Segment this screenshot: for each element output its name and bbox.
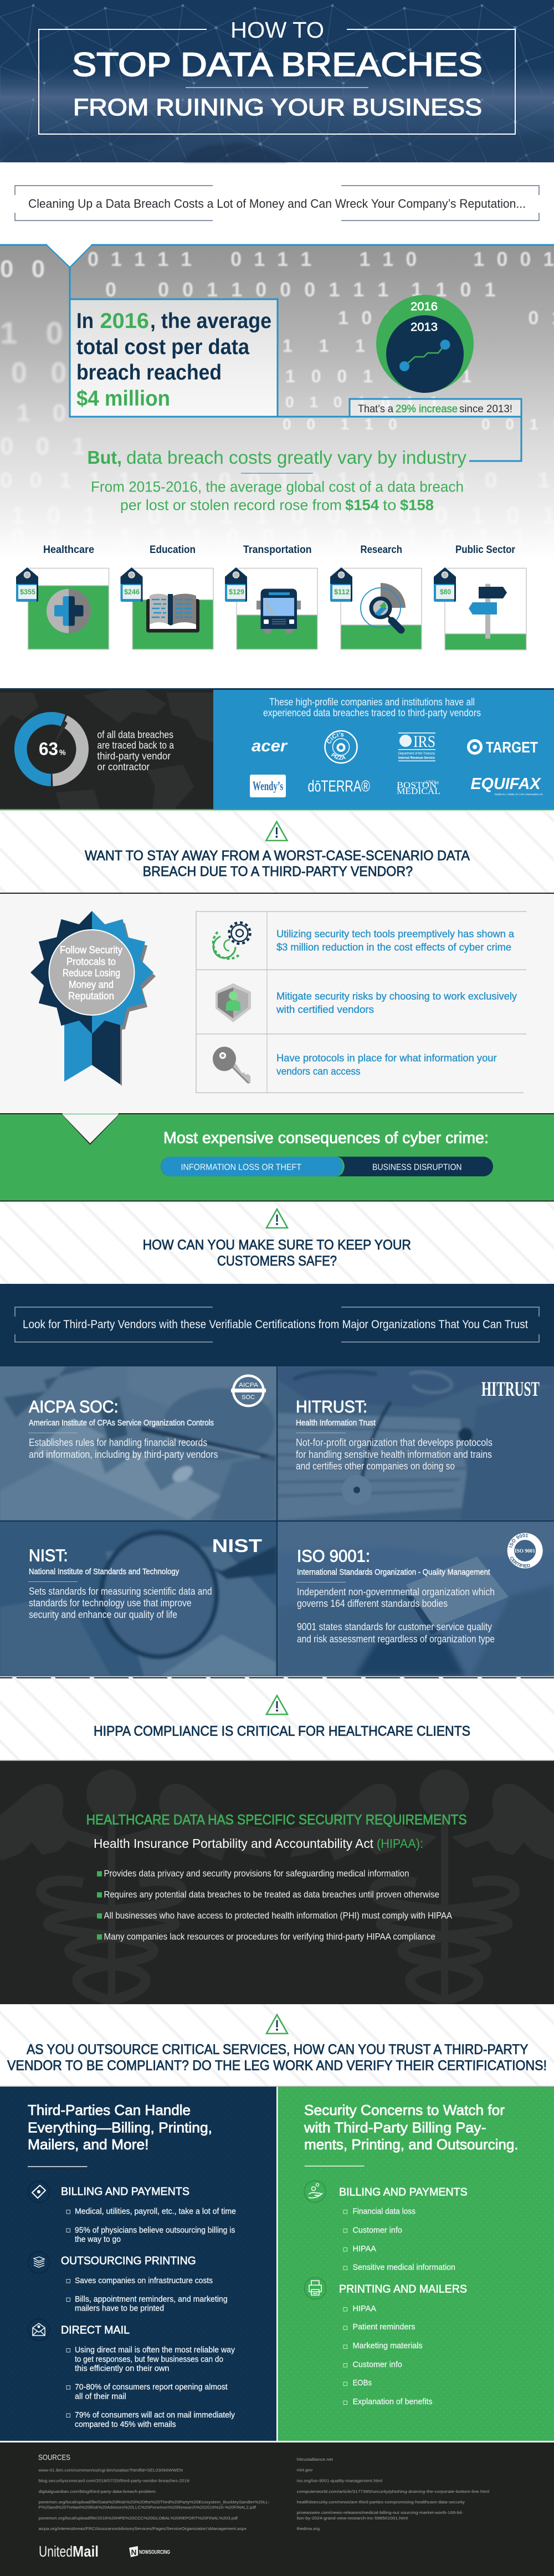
logo: iso 9001 certified: CERTIFIED	[510, 1557, 530, 1568]
callout: average cost: In	[76, 309, 94, 333]
section: keep customers safe	[0, 1201, 554, 1284]
heading: security requirements: HEALTHCARE DATA HAS SPECIFIC SECURITY REQUIREMENTS	[86, 1812, 467, 1827]
icon: open book	[146, 594, 199, 633]
heading: security concerns: Security Concerns to Watch for	[304, 2102, 505, 2118]
bullet list: hipaa: Requires any potential data breaches to be treated as data breaches until proven otherwise	[104, 1889, 439, 1900]
logo: boston medical: BOSTON	[397, 781, 437, 790]
subtitle: iso: International Standards Organization - Quality Management	[297, 1568, 490, 1577]
body: iso: governs 164 different standards bodies	[297, 1598, 448, 1609]
icon: caduceus watermark	[0, 1770, 554, 2004]
panel: iso 9001	[278, 1522, 554, 1676]
list: printing concerns: Marketing materials	[352, 2341, 423, 2350]
list: printing concerns: Explanation of benefits	[352, 2397, 433, 2406]
heading: outsourcing printing: OUTSOURCING PRINTING	[61, 2255, 196, 2267]
logo: aicpa soc	[231, 1374, 266, 1407]
column: transportation: Transportation	[243, 544, 311, 556]
text: third party share: or contractor	[97, 761, 150, 772]
body: aicpa: Establishes rules for handling financial records	[29, 1437, 207, 1448]
callout: 29% increase: since 2013!	[459, 403, 512, 415]
list: printing concerns: Customer info	[352, 2360, 402, 2369]
title frame	[39, 29, 515, 134]
text: mail items: to get responses, but few businesses can do	[75, 2354, 223, 2364]
heading: leg work	[7, 2042, 547, 2073]
panel: most expensive consequences	[0, 1114, 554, 1201]
heading: third parties: Third-Parties Can Handle	[28, 2102, 191, 2118]
bar: information loss vs disruption	[161, 1157, 493, 1176]
bullet list: hipaa: All businesses who have access to protected health information (PHI) must comply with HIPAA	[104, 1911, 453, 1921]
bar: information loss vs disruption: INFORMATION LOSS OR THEFT	[181, 1163, 301, 1172]
text: mail items: compared to 45% with emails	[75, 2420, 176, 2429]
icon: key	[213, 1047, 250, 1083]
logo: cicis pizza: PIZZA	[331, 752, 346, 760]
heading: worst case scenario	[85, 848, 470, 879]
text: third party share: of all data breaches	[97, 729, 173, 740]
text: mail items: this efficiently on their own	[75, 2364, 170, 2373]
heading: iso 9001: ISO 9001:	[297, 1546, 370, 1565]
subtitle: aicpa: American Institute of CPAs Service Organization Controls	[29, 1418, 214, 1427]
icon: billing	[28, 2181, 50, 2203]
column: healthcare: Healthcare	[43, 544, 94, 556]
panel: hitrust	[278, 1366, 554, 1520]
logo: iso 9001 certified: ISO 9001	[509, 1534, 528, 1548]
text: third party share: are traced back to a	[97, 740, 175, 751]
list: printing concerns: HIPAA	[352, 2304, 376, 2313]
body: nist: Sets standards for measuring scientific data and	[29, 1586, 212, 1597]
logo: target	[469, 739, 538, 756]
text: mail items: all of their mail	[75, 2391, 126, 2401]
sources: right column: healthitsecurity.com/news/are-third-parties-compromising-healthcare-data-security	[297, 2500, 465, 2505]
heading: direct mail: DIRECT MAIL	[61, 2324, 130, 2336]
list: billing concerns: Customer info	[352, 2225, 402, 2235]
sources: right column: prnewswire.com/news-releases/medical-billing-out sourcing-market-worth-169-bil-	[297, 2510, 463, 2515]
column: education: Education	[150, 544, 196, 556]
sources: left column: blog.securityscorecard.com/2016/07/20/third-party-vendor-breaches-2016	[39, 2478, 189, 2483]
heading: keep customers safe: HOW CAN YOU MAKE SURE TO KEEP YOUR	[143, 1237, 411, 1253]
title: how to: HOW TO	[230, 17, 324, 43]
sources: right column: thedma.org	[297, 2526, 320, 2531]
heading: sources: SOURCES	[38, 2453, 70, 2462]
sources: right column: iso.org/iso-9001-quality-management.html	[297, 2478, 382, 2483]
icon: warning triangle	[266, 822, 287, 841]
sources: left column	[38, 2467, 270, 2531]
logo: nowsourcing	[129, 2546, 170, 2557]
text: billing items: Medical, utilities, payroll, etc., take a lot of time	[75, 2207, 236, 2216]
body: nist: security and enhance our quality of life	[29, 1609, 177, 1620]
intro text: Cleaning Up a Data Breach Costs a Lot of Money and Can Wreck Your Company’s Reputation...	[28, 197, 526, 211]
text: high-profile companies: experienced data breaches traced to third-party vendors	[263, 707, 481, 718]
text: information access: Have protocols in place for what information your	[276, 1052, 497, 1064]
heading: costs vary by industry: data breach costs greatly vary by industry	[126, 447, 467, 468]
heading: billing and payments: BILLING AND PAYMENTS	[61, 2186, 189, 2198]
panel: certifications intro	[0, 1284, 554, 1678]
callout: 29% increase	[350, 399, 521, 461]
text: third party share: third-party vendor	[97, 750, 171, 761]
body: hitrust: and certifies other companies on doing so	[296, 1461, 455, 1472]
callout: average cost: $4 million	[76, 387, 170, 411]
logo: nowsourcing: N	[131, 2548, 136, 2557]
sources: left column: digitalguardian.com/blog/third-party-data-breach-problem	[39, 2489, 156, 2494]
icon: warning triangle	[266, 2015, 288, 2034]
callout: average cost: total cost per data	[76, 335, 249, 359]
sources: right column	[297, 2457, 489, 2531]
logo: nowsourcing: NOWSOURCING	[139, 2549, 170, 2555]
subheading: hipaa act: (HIPAA):	[377, 1836, 423, 1851]
text: security tech tools: $3 million reduction in the cost effects of cyber crime	[276, 941, 511, 953]
heading: worst case scenario: BREACH DUE TO A THIRD-PARTY VENDOR?	[143, 864, 413, 879]
heading: third parties: Mailers, and More!	[28, 2136, 148, 2153]
list: printing concerns	[343, 2304, 433, 2406]
icon: medical cross	[47, 589, 91, 633]
text: certified vendors	[276, 990, 517, 1015]
logo: acer: acer	[252, 737, 288, 755]
body: iso: and risk assessment regardless of organization type	[297, 1633, 495, 1645]
logo: equifax: EQUIFAX	[471, 775, 541, 793]
logo: cicis pizza: CiCi’s	[327, 733, 343, 744]
text: cost per record: $158	[400, 496, 434, 513]
panel: security concerns to watch	[278, 2087, 554, 2441]
chart: 2013 vs 2016 circles: 2016	[411, 300, 438, 313]
icon: magnifier	[361, 583, 406, 630]
logo: aicpa soc: AICPA	[239, 1382, 259, 1389]
sources: right column: hitrustalliance.net	[297, 2457, 334, 2462]
heading: aicpa soc: AICPA SOC:	[29, 1397, 119, 1416]
logo: doterra: dōTERRA®	[308, 778, 370, 796]
body: nist: standards for technology use that improve	[29, 1597, 192, 1609]
logo: wendys: Wendy’s	[253, 779, 283, 793]
body: hitrust	[296, 1437, 493, 1472]
logo: boston medical: MEDICAL	[397, 787, 440, 796]
list: billing concerns: Sensitive medical information	[352, 2263, 455, 2272]
price tag: $129: $129	[229, 587, 244, 596]
price tag: $246: $246	[124, 587, 140, 596]
text: printing items: Saves companies on infrastructure costs	[75, 2276, 213, 2285]
price tag: $112: $112	[334, 587, 350, 596]
badge: follow security protocols: Reputation	[68, 991, 114, 1002]
callout: average cost: 2016	[100, 309, 149, 333]
sources: left column: aicpa.org/InterestAreas/FRC/AssuranceAdvisoryServices/Pages/ServiceOrganization’sManagement.aspx	[39, 2526, 247, 2531]
logo: irs: IRS	[413, 733, 435, 751]
heading: keep customers safe: CUSTOMERS SAFE?	[217, 1253, 337, 1269]
title: stop data breaches: STOP DATA BREACHES	[72, 46, 483, 83]
panel: binary background with cost stats: 0 0	[11, 357, 74, 389]
list: printing	[66, 2280, 70, 2302]
panel: security protocols	[0, 893, 554, 1114]
logo: unitedmail: United	[39, 2543, 73, 2560]
icon: hand with coin	[304, 2181, 326, 2202]
text: printing items	[75, 2276, 228, 2313]
section: verify certifications	[0, 2004, 554, 2086]
logo: irs: Department of the Treasury	[398, 752, 435, 756]
body: aicpa	[29, 1437, 218, 1460]
text: high-profile companies	[263, 697, 481, 718]
heading: nist: NIST:	[29, 1545, 68, 1565]
chart: 63 percent donut: 63	[39, 739, 58, 759]
text: certified vendors: with certified vendors	[276, 1003, 374, 1015]
panel: nist	[0, 1522, 276, 1676]
heading: third parties: Everything—Billing, Printing,	[28, 2119, 212, 2135]
sources: right column: computerworld.com/article/3177395/security/phishing-draining-the-corporate-bottom-line.html	[297, 2489, 489, 2494]
icon: mail	[28, 2319, 50, 2341]
panel: third-parties can handle everything	[0, 2087, 276, 2441]
heading: billing and payments: BILLING AND PAYMENTS	[339, 2186, 468, 2199]
bullet list: hipaa: Many companies lack resources or procedures for verifying third-party HIPAA compliance	[104, 1931, 435, 1942]
text: mail items: 79% of consumers will act on mail immediately	[75, 2410, 235, 2420]
icon: printing	[28, 2252, 50, 2273]
chart: 63 percent donut	[20, 718, 83, 780]
logo: nist: NIST	[212, 1535, 262, 1556]
notch and connector line	[0, 245, 554, 267]
panel: aicpa soc	[0, 1366, 276, 1520]
panel: binary background with cost stats	[0, 243, 554, 560]
icon: signpost	[469, 584, 507, 639]
list: billing	[66, 2210, 70, 2232]
body: iso: 9001 states standards for customer service quality	[297, 1621, 492, 1632]
heading: costs vary by industry: But,	[88, 447, 122, 468]
bullet list: hipaa	[97, 1868, 453, 1942]
logo: iso 9001 certified	[507, 1533, 543, 1568]
text: information access	[276, 1052, 497, 1077]
list: billing concerns	[343, 2206, 455, 2272]
logo: boston medical	[397, 780, 440, 796]
text: information access: vendors can access	[276, 1066, 360, 1077]
sources: right column: nist.gov	[297, 2467, 313, 2472]
chart: 63 percent donut: %	[59, 748, 66, 757]
panel: binary background with cost stats: 1 0	[17, 400, 74, 427]
heading: security concerns: ments, Printing, and Outsourcing.	[304, 2136, 519, 2153]
heading: printing and mailers: PRINTING AND MAILERS	[339, 2283, 467, 2296]
text: security tech tools	[276, 928, 515, 953]
list: billing concerns: HIPAA	[352, 2244, 376, 2254]
intro banner	[15, 186, 539, 221]
badge: follow security protocols: Protocals to	[66, 956, 116, 967]
panel: 63 percent of breaches	[0, 688, 554, 809]
column: transportation	[225, 544, 317, 649]
text: cost per record: $154	[345, 496, 379, 513]
text: cost per record	[91, 479, 464, 513]
section: third-party vendor question	[0, 810, 554, 893]
text: cost per record: to	[383, 496, 397, 513]
icon: printer	[305, 2277, 326, 2299]
text: cost per record: From 2015-2016, the average global cost of a data breach	[91, 479, 464, 495]
list: printing concerns: Patient reminders	[352, 2322, 415, 2332]
price tag: $80: $80	[440, 587, 451, 596]
callout: average cost: breach reached	[76, 361, 222, 385]
text: mail items: 70-80% of consumers report opening almost	[75, 2383, 228, 2392]
sources: left column: P%20and%20Treliant%20Risk%20Advisors%20LLC%20Ponemon%20Research%202016%20-%20FINAL2.pdf	[39, 2505, 257, 2510]
body: iso: Independent non-governmental organization which	[297, 1586, 495, 1597]
subtitle: hitrust: Health Information Trust	[296, 1418, 376, 1427]
footer: sources	[0, 2442, 554, 2576]
logo: irs: Internal Revenue Service	[398, 756, 435, 760]
callout: 29% increase: That’s a	[358, 403, 393, 415]
panel: healthcare data requirements	[0, 1760, 554, 2004]
sources: left column: ponemon.org/local/upload/file/2016%20HPE%20CCC%20GLOBAL%20REPORT%20FINAL%203.pdf	[39, 2516, 238, 2521]
section: hipaa heading	[0, 1677, 554, 1760]
panel: binary background with cost stats: 0 0 1	[0, 433, 93, 460]
icon: gears	[213, 923, 250, 959]
badge: follow security protocols: Reduce Losing	[63, 967, 120, 979]
title: from ruining your business: FROM RUINING YOUR BUSINESS	[73, 94, 482, 121]
text: printing items: Bills, appointment reminders, and marketing	[75, 2295, 228, 2304]
icon: shield	[216, 983, 251, 1022]
callout: 29% increase: 29% increase	[396, 403, 458, 415]
sources: left column: www-01.ibm.com/common/ssi/cgi-bin/ssialias?htmlfid=SEL03094WWEN	[38, 2467, 183, 2472]
sources: left column: ponemon.org/local/upload/file/Data%20Risk%20i%20the%20Third%20Party%20Ecosystem_BuckleySandler%20LL-	[39, 2500, 270, 2505]
panel: binary background with cost stats: 0 0	[0, 255, 50, 283]
column: research: Research	[360, 544, 402, 556]
column: public sector	[434, 544, 526, 650]
panel: breached companies	[213, 690, 554, 809]
list: mail	[66, 2348, 70, 2417]
price tag: $355: $355	[20, 587, 35, 596]
text: printing items: mailers have to be printed	[75, 2304, 164, 2313]
subheading: hipaa act: Health Insurance Portability and Accountability Act	[94, 1836, 374, 1851]
column: public sector: Public Sector	[455, 544, 516, 556]
text: security tech tools: Utilizing security tech tools preemptively has shown a	[276, 928, 515, 940]
heading: consequences: Most expensive consequences of cyber crime:	[163, 1129, 489, 1147]
text: mail items: Using direct mail is often the most reliable way	[75, 2345, 235, 2354]
logo: aicpa soc: SOC	[242, 1394, 255, 1401]
list: billing concerns: Financial data loss	[352, 2206, 416, 2216]
logo: equifax: Equifax Inc. | Atlanta, GA | USA | www.equifax.com	[495, 793, 543, 796]
panel: binary background with cost stats: 1 0	[0, 315, 73, 350]
column: healthcare	[16, 544, 109, 649]
logo: iso 9001 certified: ISO 9001	[515, 1548, 536, 1554]
bullet list: hipaa: Provides data privacy and security provisions for safeguarding medical information	[104, 1868, 409, 1879]
body: hitrust: for handling sensitive health information and trains	[296, 1449, 492, 1460]
text: billing items	[75, 2207, 236, 2244]
text: billing items: the way to go	[75, 2235, 121, 2244]
logo: target: TARGET	[486, 739, 538, 756]
callout: average cost	[70, 299, 278, 417]
badge: follow security protocols	[30, 911, 156, 1086]
text: high-profile companies: These high-profile companies and institutions have all	[269, 697, 475, 708]
text: billing items: 95% of physicians believe outsourcing billing is	[75, 2225, 235, 2235]
icon: warning triangle	[266, 1209, 288, 1228]
body: iso	[297, 1586, 495, 1645]
sources: right column: lion-by-2024-grand-view-research-inc-596501001.html	[297, 2516, 408, 2521]
body: aicpa: and information, including by third-party vendors	[29, 1449, 218, 1460]
heading: hippa compliance: HIPPA COMPLIANCE IS CRITICAL FOR HEALTHCARE CLIENTS	[94, 1724, 470, 1739]
heading: third parties	[28, 2102, 212, 2153]
chart: 2013 vs 2016 circles: 2013	[411, 321, 438, 334]
logo: irs	[398, 733, 435, 761]
header banner	[0, 0, 554, 162]
body: nist	[29, 1586, 212, 1620]
chart: 2013 vs 2016 circles	[376, 295, 474, 393]
heading: worst case scenario: WANT TO STAY AWAY FROM A WORST-CASE-SCENARIO DATA	[85, 848, 470, 864]
heading: hitrust: HITRUST:	[296, 1397, 367, 1416]
icon: bus	[257, 588, 301, 634]
text: third party share	[97, 729, 175, 772]
column: education	[121, 544, 213, 649]
body: hitrust: Not-for-profit organization that develops protocols	[296, 1437, 493, 1448]
badge: follow security protocols: Follow Security	[60, 944, 122, 955]
heading: keep customers safe	[143, 1237, 411, 1269]
logo: cicis pizza	[324, 730, 358, 764]
heading: security concerns	[304, 2102, 519, 2153]
subtitle: nist: National Institute of Standards and Technology	[29, 1568, 179, 1576]
logo: wendys	[250, 775, 286, 797]
callout: average cost: , the average	[150, 309, 271, 333]
text: cost per record: per lost or stolen record rose from	[120, 496, 342, 513]
list: printing concerns: EOBs	[352, 2378, 372, 2388]
bar: information loss vs disruption: BUSINESS DISRUPTION	[372, 1163, 462, 1172]
text: mail items	[75, 2345, 235, 2429]
text: certified vendors: Mitigate security risks by choosing to work exclusively	[276, 990, 517, 1002]
icon: warning triangle	[266, 1696, 288, 1714]
world map watermark	[0, 690, 213, 809]
column: research	[330, 544, 422, 649]
badge: follow security protocols: Money and	[69, 979, 114, 990]
logo: unitedmail: Mail	[73, 2543, 99, 2560]
logo: boston medical: CENTER	[423, 780, 439, 785]
heading: security concerns: with Third-Party Billing Pay-	[304, 2119, 486, 2135]
